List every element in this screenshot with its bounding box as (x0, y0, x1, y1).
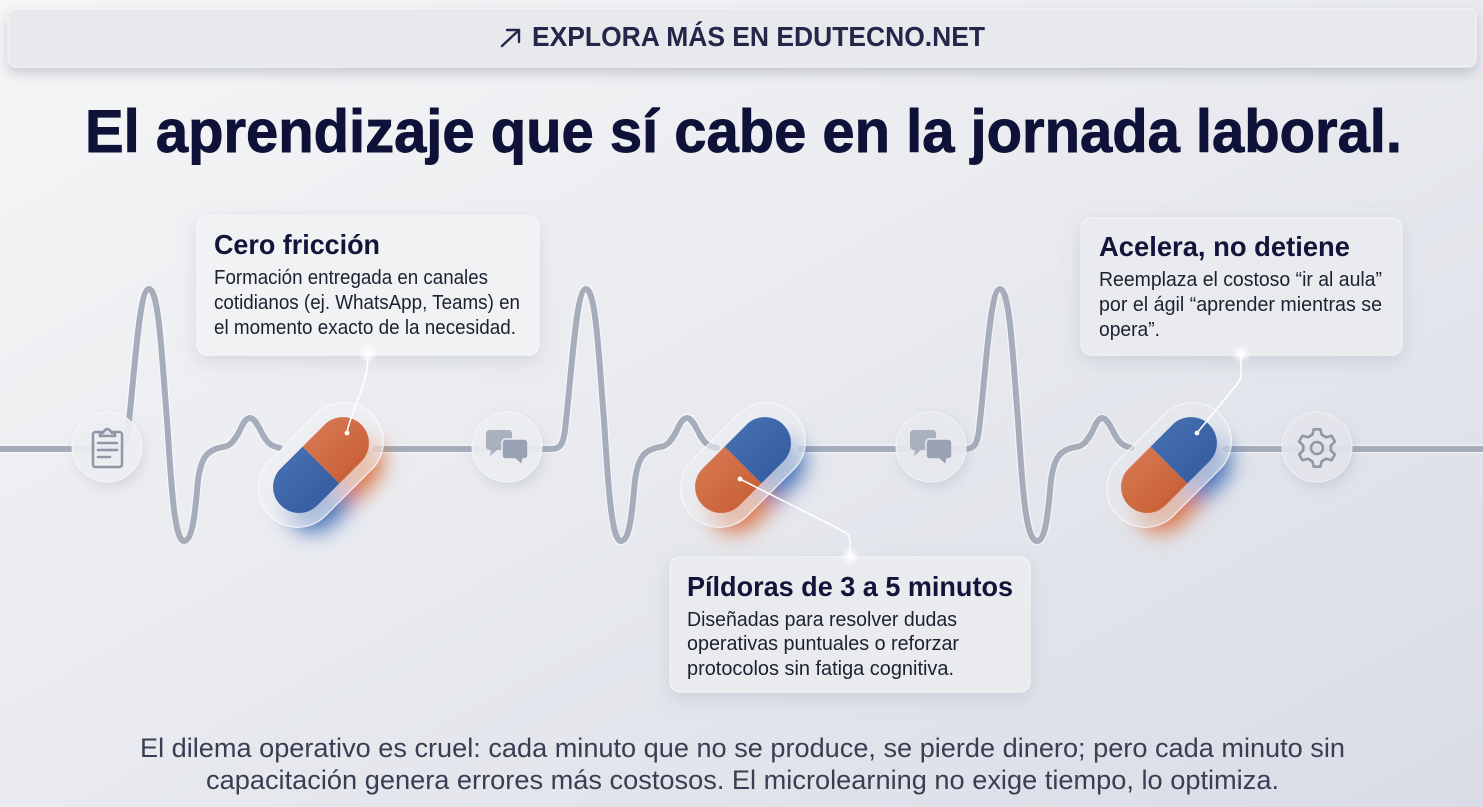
node: gear (1282, 412, 1352, 482)
top banner (8, 9, 1476, 67)
card heading: Cero fricción (214, 229, 380, 260)
node: clipboard (72, 412, 142, 482)
pill 3 (1091, 387, 1247, 543)
card text (214, 267, 520, 339)
card text: Reemplaza el costoso “ir al aula” (1099, 269, 1382, 291)
card text (687, 609, 959, 680)
pill 1 (243, 387, 399, 543)
panel: pildoras (670, 557, 1030, 692)
card heading: Píldoras de 3 a 5 minutos (687, 571, 1013, 602)
card text: el momento exacto de la necesidad. (214, 317, 516, 339)
icon: chat bubbles (910, 430, 952, 465)
panel: acelera (1081, 218, 1402, 355)
icon: gear (1299, 429, 1335, 467)
card text: opera”. (1099, 319, 1160, 341)
icon: external link arrow (502, 30, 519, 46)
card text (1099, 269, 1382, 341)
closing text: El dilema operativo es cruel: cada minuto que no se produce, se pierde dinero; pero cada minuto sin (140, 733, 1345, 763)
heartbeat line (0, 289, 1483, 541)
closing text: capacitación genera errores más costosos. El microlearning no exige tiempo, lo optimiza. (206, 765, 1279, 795)
card text: operativas puntuales o reforzar (687, 633, 959, 655)
panel: cero friccion (197, 216, 539, 355)
title: El aprendizaje que sí cabe en la jornada laboral. (85, 98, 1402, 165)
banner text: EXPLORA MÁS EN EDUTECNO.NET (532, 21, 985, 52)
icon: chat bubbles (486, 430, 528, 465)
icon: clipboard (93, 429, 122, 467)
card text: por el ágil “aprender mientras se (1099, 294, 1382, 316)
card text: protocolos sin fatiga cognitiva. (687, 658, 954, 680)
connector: card 2 to pill 2 (738, 477, 856, 562)
node: chat 1 (472, 412, 542, 482)
card text: Diseñadas para resolver dudas (687, 609, 957, 631)
pill 2 (665, 387, 821, 543)
closing text (140, 733, 1345, 795)
connector: card 1 to pill 1 (345, 348, 374, 435)
node: chat 2 (896, 412, 966, 482)
card text: Formación entregada en canales (214, 267, 488, 289)
connector: card 3 to pill 3 (1195, 348, 1247, 435)
card text: cotidianos (ej. WhatsApp, Teams) en (214, 292, 520, 314)
card heading: Acelera, no detiene (1099, 231, 1350, 262)
